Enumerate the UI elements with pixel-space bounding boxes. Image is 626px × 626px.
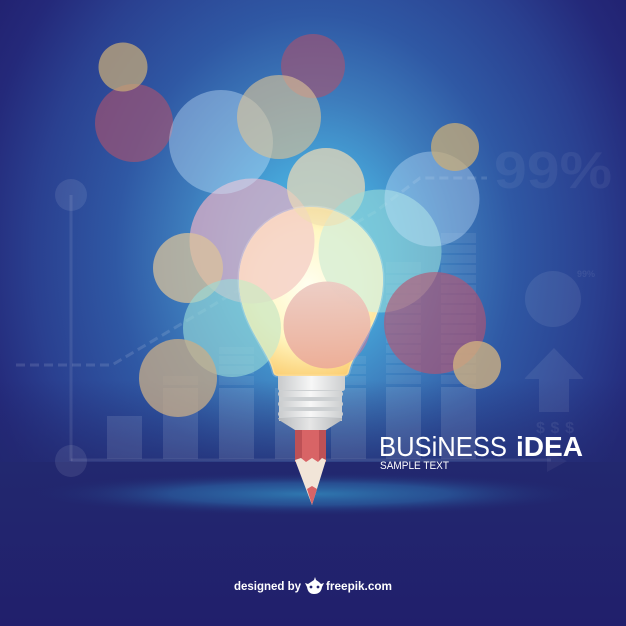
floor band bbox=[0, 462, 626, 626]
footer credit bbox=[234, 577, 392, 594]
circle: maroon right bbox=[384, 272, 486, 374]
title word: iDEA: iDEA bbox=[516, 431, 583, 462]
large 99% figure: 99% bbox=[494, 142, 612, 200]
chart axes bbox=[55, 179, 567, 477]
subtitle: SAMPLE TEXT bbox=[380, 460, 449, 472]
credit text left: designed by bbox=[234, 579, 301, 593]
circle: blue right bbox=[384, 152, 480, 246]
title: Business Idea bbox=[379, 431, 583, 472]
bulb glass bbox=[239, 207, 383, 376]
tinted reflections in bulb bbox=[239, 208, 383, 368]
circle: teal left bbox=[183, 279, 281, 377]
floor glow bbox=[30, 470, 590, 518]
small 99% dial: 99% bbox=[577, 269, 595, 279]
title word: BUSiNESS: BUSiNESS bbox=[379, 431, 507, 462]
light bulb and pencil bbox=[238, 206, 384, 505]
circle: tan lower right bbox=[453, 341, 501, 389]
up arrow bbox=[525, 348, 583, 412]
dashed trend line bbox=[16, 178, 487, 365]
faded chart backdrop bbox=[16, 142, 612, 477]
pencil bbox=[295, 430, 326, 505]
dollar signs: $$$ bbox=[536, 420, 574, 437]
circle: maroon left bbox=[95, 84, 173, 162]
circle: tan lower left bbox=[139, 339, 217, 417]
circle: large purple bbox=[190, 178, 314, 304]
circle: maroon top bbox=[281, 34, 345, 98]
circle: large teal right bbox=[318, 190, 442, 312]
small 99% dial bbox=[525, 269, 595, 327]
bar chart solid bars bbox=[107, 387, 476, 459]
circle: tan upper right bbox=[431, 123, 479, 171]
bar chart striped tops bbox=[163, 233, 476, 385]
credit text right: freepik.com bbox=[326, 579, 392, 593]
circle: light blue bbox=[169, 90, 273, 194]
bokeh circles behind bulb bbox=[95, 34, 501, 417]
bulb screw base bbox=[278, 376, 345, 430]
circle: tan left bbox=[153, 233, 223, 303]
icon: freepik mascot bbox=[305, 577, 324, 594]
circle: pink over bulb bbox=[284, 282, 370, 368]
circle: tan centre bbox=[287, 148, 365, 226]
circle: tan top bbox=[237, 75, 321, 159]
lower background shading bbox=[0, 380, 626, 462]
circle: tan top left bbox=[98, 42, 148, 92]
